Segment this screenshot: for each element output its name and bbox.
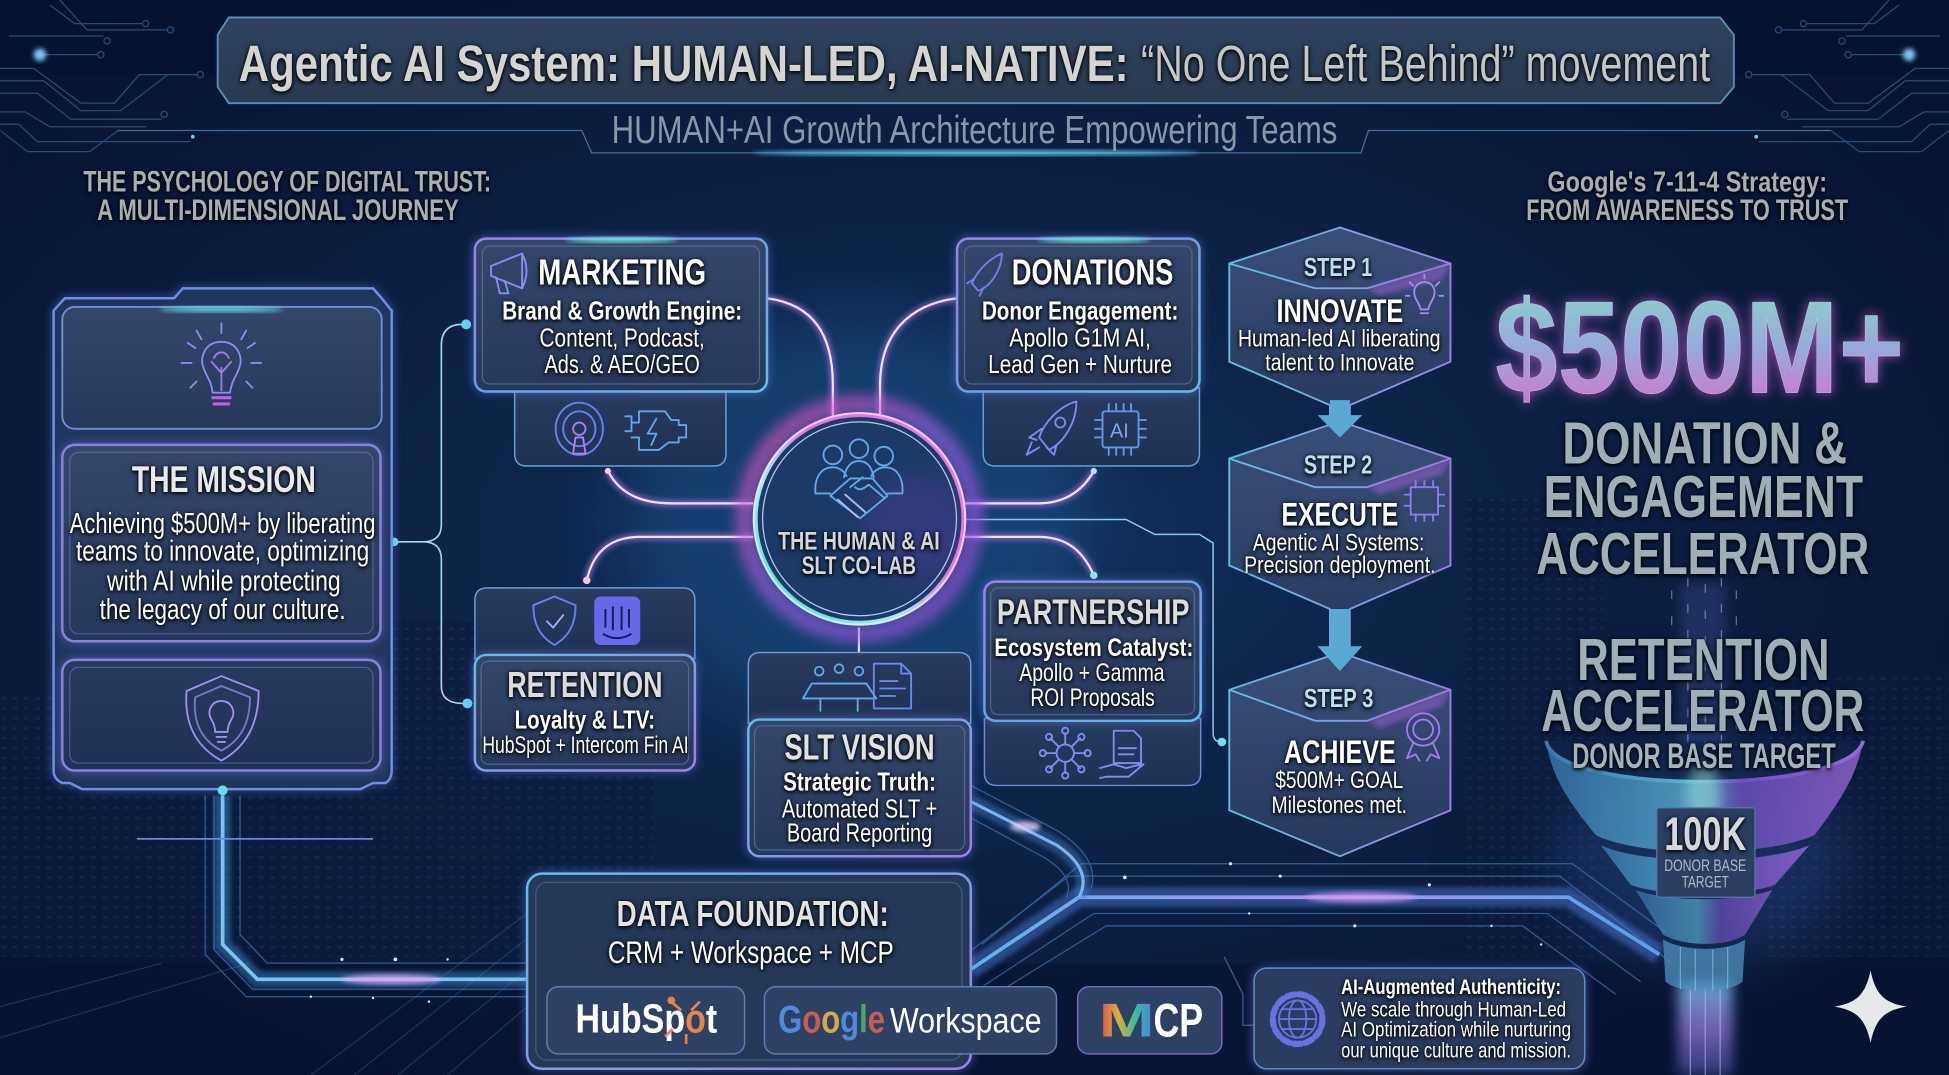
marketing description: Brand & Growth Engine: xyxy=(502,295,742,325)
light stream above funnel xyxy=(1672,578,1736,752)
data foundation description: CRM + Workspace + MCP xyxy=(608,935,894,970)
retention description: HubSpot + Intercom Fin AI xyxy=(482,733,689,759)
authenticity text: AI Optimization while nurturing xyxy=(1341,1018,1571,1041)
SLT icons tray xyxy=(748,652,971,723)
authenticity text xyxy=(1341,976,1571,1063)
hub label: SLT CO-LAB xyxy=(802,553,916,580)
central hub xyxy=(745,405,974,633)
donations description: Lead Gen + Nurture xyxy=(988,349,1172,379)
logo: MCP: M xyxy=(1099,994,1155,1047)
left heading xyxy=(83,165,491,227)
mission text card: the legacy of our culture. xyxy=(100,594,346,626)
subtitle: HUMAN+AI Growth Architecture Empowering Teams xyxy=(612,109,1337,152)
partnership description: Ecosystem Catalyst: xyxy=(994,635,1193,662)
step 1 hexagon: INNOVATE xyxy=(1276,293,1403,329)
logo: Google Workspace xyxy=(764,987,1057,1054)
hub connectors xyxy=(583,298,1226,746)
step 3 hexagon: STEP 3 xyxy=(1304,683,1373,713)
icon: rocket xyxy=(967,254,1002,296)
retention icons tray xyxy=(475,588,695,659)
right heading xyxy=(1526,166,1848,227)
donations description: Donor Engagement: xyxy=(982,295,1178,325)
funnel xyxy=(1546,741,1863,1075)
100K callout: 100K xyxy=(1664,808,1746,861)
step 1 hexagon xyxy=(1229,227,1450,423)
step 2 hexagon xyxy=(1229,421,1450,654)
SLT description: Strategic Truth: xyxy=(783,766,936,796)
panel: AI-augmented authenticity xyxy=(1254,968,1585,1069)
icon: intercom xyxy=(594,597,640,645)
partnership description: Apollo + Gamma xyxy=(1019,660,1165,687)
title text: Agentic AI System: HUMAN-LED, AI-NATIVE: xyxy=(239,35,1129,92)
partnership title: PARTNERSHIP xyxy=(997,594,1190,632)
retention title: RETENTION xyxy=(507,664,663,705)
accelerator headings: DONATION & xyxy=(1562,410,1847,477)
accelerator headings: RETENTION xyxy=(1577,626,1830,693)
left heading: A MULTI-DIMENSIONAL JOURNEY xyxy=(97,194,459,227)
donations description: Apollo G1M AI, xyxy=(1009,323,1151,353)
donations icons tray: AI xyxy=(1110,420,1129,442)
authenticity text: We scale through Human-Led xyxy=(1341,999,1566,1022)
mission text card: teams to innovate, optimizing xyxy=(76,535,369,567)
mission output dot xyxy=(218,785,228,795)
donations description xyxy=(982,295,1178,379)
retention description xyxy=(482,704,689,759)
logo: Google Workspace: Workspace xyxy=(890,1003,1042,1041)
marketing title: MARKETING xyxy=(538,252,706,293)
marketing icons tray xyxy=(515,388,726,466)
step 2 hexagon: EXECUTE xyxy=(1281,497,1398,533)
SLT title: SLT VISION xyxy=(784,726,935,767)
logo: Google Workspace: Google xyxy=(778,999,885,1042)
arrow: step 1 to step 2 xyxy=(1318,400,1362,437)
icon: sparkle star xyxy=(1834,971,1907,1043)
hub label: THE HUMAN & AI xyxy=(778,528,940,555)
partnership description: ROI Proposals xyxy=(1030,685,1155,712)
icon: AI chip xyxy=(1404,481,1444,521)
step 1 hexagon: Human-led AI liberating xyxy=(1238,327,1441,353)
circuit traces: top right xyxy=(945,0,1949,153)
arrow: step 2 to step 3 xyxy=(1318,609,1362,671)
step flow xyxy=(1229,227,1450,856)
SLT description xyxy=(782,766,937,847)
retention description: Loyalty & LTV: xyxy=(515,704,655,734)
panel: data foundation xyxy=(527,874,1222,1069)
step 3 hexagon xyxy=(1229,652,1450,856)
mission top card with bulb icon xyxy=(62,307,382,429)
100K callout xyxy=(1657,808,1755,897)
mission text card: with AI while protecting xyxy=(106,565,341,597)
background glow behind hub xyxy=(623,311,1095,733)
SLT description: Board Reporting xyxy=(787,817,932,847)
panel: SLT vision xyxy=(748,652,971,856)
step 3 hexagon: $500M+ GOAL xyxy=(1275,768,1403,794)
donations icons tray xyxy=(983,388,1199,466)
icon: megaphone xyxy=(491,254,526,293)
title banner xyxy=(218,17,1734,103)
authenticity text: AI-Augmented Authenticity: xyxy=(1341,976,1561,999)
panel: mission xyxy=(54,288,392,789)
hub label xyxy=(778,528,940,580)
mission text card: Achieving $500M+ by liberating xyxy=(70,508,375,540)
connector: mission to marketing and retention xyxy=(390,319,472,708)
title text: “No One Left Behind” movement xyxy=(1141,35,1710,92)
logo: MCP: CP xyxy=(1153,994,1203,1047)
left heading: THE PSYCHOLOGY OF DIGITAL TRUST: xyxy=(83,165,491,198)
marketing description: Ads. & AEO/GEO xyxy=(545,349,700,379)
100K callout: TARGET xyxy=(1682,873,1729,891)
panel: donations xyxy=(957,237,1199,466)
step 3 hexagon: ACHIEVE xyxy=(1284,734,1396,770)
step 3 hexagon: Milestones met. xyxy=(1272,793,1407,819)
100K callout: DONOR BASE xyxy=(1664,857,1746,875)
mission text card xyxy=(62,445,380,641)
panel: retention xyxy=(475,588,695,771)
partnership icons tray xyxy=(984,718,1201,785)
mission bottom card with shield icon xyxy=(62,660,380,771)
mission text card: THE MISSION xyxy=(132,458,316,500)
icon: bulb xyxy=(1406,275,1443,313)
accelerator headings xyxy=(1536,410,1869,744)
icon: gear globe xyxy=(1273,994,1322,1044)
SLT description: Automated SLT + xyxy=(782,794,937,824)
logo: MCP xyxy=(1078,987,1222,1054)
panel: marketing xyxy=(475,237,767,466)
marketing description xyxy=(502,295,742,379)
panel: partnership xyxy=(984,582,1201,785)
icon: medal xyxy=(1407,713,1439,761)
donor base target label: DONOR BASE TARGET xyxy=(1572,738,1836,776)
step 1 hexagon: talent to Innovate xyxy=(1265,350,1414,376)
donations title: DONATIONS xyxy=(1012,252,1173,293)
logo: HubSpot xyxy=(547,987,745,1054)
data foundation title: DATA FOUNDATION: xyxy=(617,893,889,934)
icon: team handshake xyxy=(815,439,903,518)
step 2 hexagon: Agentic AI Systems: xyxy=(1253,531,1424,557)
data pipelines xyxy=(137,785,1672,1025)
step 2 hexagon: STEP 2 xyxy=(1304,449,1372,479)
partnership description xyxy=(994,635,1193,712)
right heading: Google's 7-11-4 Strategy: xyxy=(1547,166,1827,198)
circuit traces: top left xyxy=(0,0,945,153)
step 2 hexagon: Precision deployment. xyxy=(1244,553,1436,579)
logo: HubSpot: HubSpot xyxy=(576,996,718,1042)
marketing description: Content, Podcast, xyxy=(540,323,705,353)
authenticity text: our unique culture and mission. xyxy=(1341,1040,1571,1063)
step 1 hexagon: STEP 1 xyxy=(1304,252,1372,282)
